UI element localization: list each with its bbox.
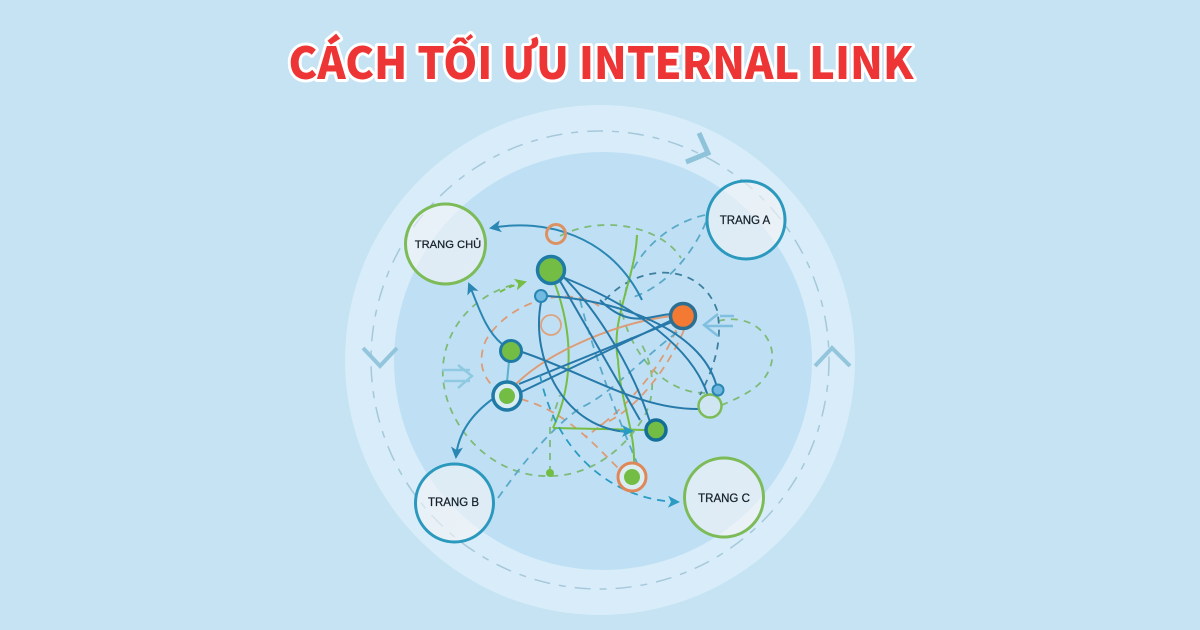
arrow to Trang Chủ (bottom) [469, 284, 502, 344]
solid blue links [519, 270, 716, 432]
title: CÁCH TỐI ƯU INTERNAL LINK [288, 28, 914, 92]
solid green links [553, 235, 646, 463]
orange dashed links [482, 297, 684, 472]
arrow to Trang B [456, 398, 494, 457]
network links [443, 215, 772, 498]
nodes [493, 224, 724, 491]
green dashed links [443, 225, 772, 476]
node: Trang B: TRANG B [428, 497, 479, 509]
chevron: right [815, 348, 850, 366]
outer ring [345, 105, 855, 615]
hollow arrow right [442, 365, 472, 388]
blue dashed links [498, 215, 706, 498]
orange solid arc [515, 316, 672, 385]
green dashed arrow [500, 282, 525, 292]
node: Trang Chủ [406, 204, 486, 284]
hollow arrow left [704, 314, 734, 336]
chevron: left [363, 348, 397, 366]
chevron: top [686, 133, 708, 162]
node: Trang C [684, 458, 764, 537]
arrow to Trang Chủ (top) [491, 225, 642, 300]
node: Trang A [707, 181, 785, 259]
arrow to Trang C [540, 375, 678, 502]
dark dashed arc [605, 273, 719, 395]
arrow: green to teal node [620, 430, 632, 432]
node: Trang Chủ: TRANG CHỦ [415, 238, 481, 251]
connector: small nodes [507, 361, 509, 382]
node: Trang A: TRANG A [720, 215, 771, 227]
node: Trang B [416, 464, 494, 542]
node: Trang C: TRANG C [698, 493, 750, 505]
